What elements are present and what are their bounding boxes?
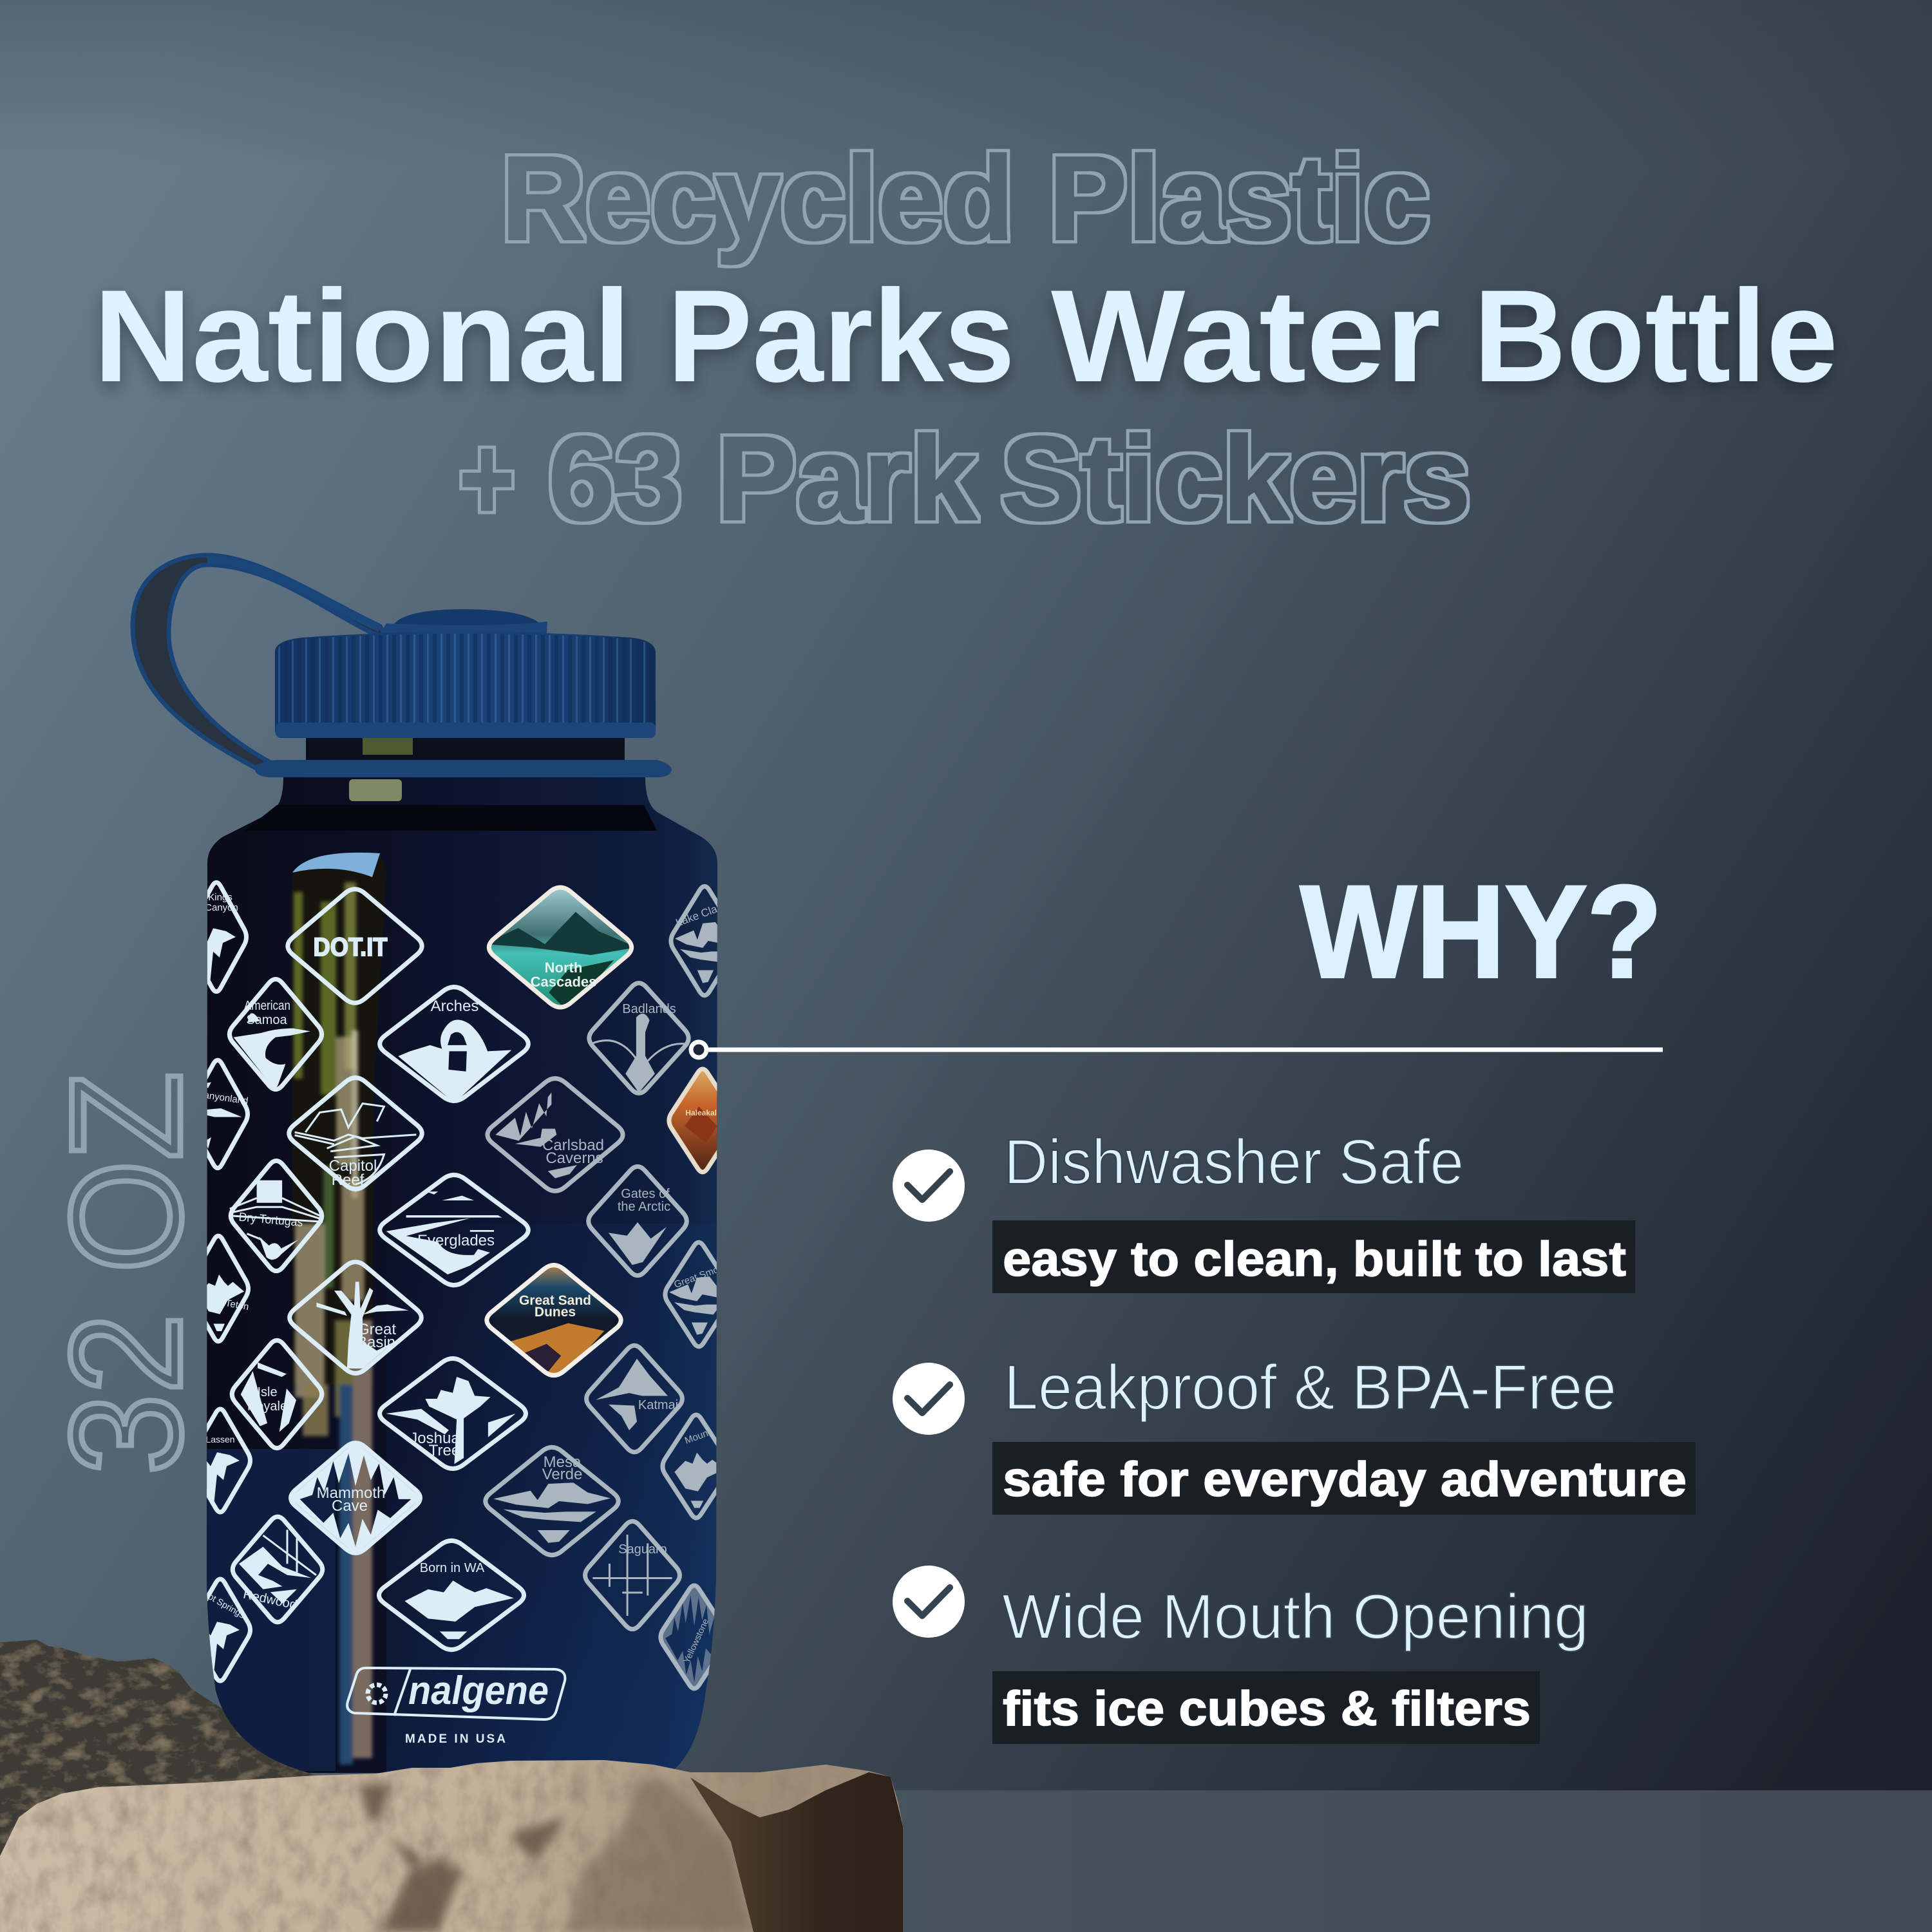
nalgene logo: nalgene [408, 1669, 549, 1713]
sticker: Carlsbad Caverns: Caverns [545, 1150, 603, 1167]
sticker: Hot Springs: Hot Springs [201, 1587, 247, 1620]
sticker: Great Sand Dunes: Great Sand [519, 1293, 591, 1308]
size label: 32 OZ: 32 OZ [37, 1072, 214, 1475]
sticker: Great Smoky Mountains [665, 1242, 732, 1347]
bottle reflections [207, 853, 717, 1777]
reflection base [292, 853, 386, 1385]
sticker: Lake Clark: Lake Clark [674, 900, 728, 929]
bottle neck [306, 734, 625, 763]
sticker: Hawaii Volcanoes: Haleakala [685, 1108, 721, 1117]
bottle strap loop [133, 555, 386, 768]
title: 63 Park Stickers outline: + [459, 412, 515, 545]
sticker: Dry Tortugas [230, 1160, 323, 1271]
neck reflection upper [363, 735, 413, 755]
sticker: North Cascades: Cascades [531, 974, 596, 990]
sticker: Gates of the Arctic: Gates of [621, 1187, 670, 1201]
sticker: American Samoa [229, 979, 322, 1090]
rock dark right face [690, 1772, 903, 1932]
feature: wide mouth: Wide Mouth Opening [1002, 1581, 1589, 1652]
sticker: Born in WA [379, 1540, 524, 1650]
reflection streaks [294, 882, 372, 1765]
title: 63 Park Stickers outline: 63 [548, 412, 682, 545]
sticker: Capitol Reef: Reef [332, 1171, 365, 1189]
rock mid-shade face [567, 1777, 753, 1932]
sticker: Great Smoky Mountains: Great Smoky [672, 1261, 730, 1291]
sticker: Arches [380, 987, 528, 1101]
sticker: Redwood: Redwood [242, 1587, 298, 1613]
sticker: American Samoa: Samoa [246, 1013, 288, 1027]
sticker: Great Sand Dunes [482, 1261, 626, 1379]
bottle [133, 555, 717, 1777]
title: National Parks Water Bottle: Parks [667, 263, 1015, 410]
title: National Parks Water Bottle: Bottle [1473, 263, 1838, 410]
sticker: Hawaii Volcanoes [667, 1065, 739, 1176]
sticker: Kings Canyon [187, 882, 246, 992]
callout line [691, 1042, 1663, 1057]
sticker: Katmai [587, 1345, 682, 1452]
sticker: DOT.IT [288, 889, 422, 1003]
title: 63 Park Stickers outline: Stickers [1001, 412, 1471, 545]
sticker: Lassen Volcanic: Lassen [205, 1434, 235, 1444]
sticker: Great Basin [290, 1262, 421, 1373]
sticker: Carlsbad Caverns [488, 1079, 623, 1191]
logo pinwheel icon [368, 1685, 386, 1703]
sticker: Katmai: Katmai [638, 1398, 678, 1412]
sticker: Gates of the Arctic: the Arctic [618, 1200, 670, 1214]
sticker: North Cascades [484, 883, 637, 1012]
sticker: Mount Rainier [663, 1415, 730, 1518]
icon: check [893, 1566, 965, 1638]
sticker: Grand Teton [188, 1236, 250, 1341]
sticker: Mesa Verde: Verde [542, 1466, 582, 1483]
sticker: Isle Royale: Isle [257, 1385, 278, 1399]
sticker: Canyonlands: Canyonland [196, 1089, 249, 1107]
nalgene logo [347, 1668, 565, 1746]
feature: leakproof [893, 1352, 1696, 1515]
sticker: Gates of the Arctic [589, 1166, 687, 1276]
sticker: Mammoth Cave: Cave [332, 1497, 368, 1515]
title: National Parks Water Bottle: National [93, 263, 631, 410]
sticker: DOT.IT: DOT.IT [313, 933, 388, 961]
feature: dishwasher safe [893, 1126, 1635, 1293]
feature: leakproof: safe for everyday adventure [1003, 1452, 1687, 1507]
sticker: Great Sand Dunes: Dunes [535, 1305, 576, 1320]
sticker: Carlsbad Caverns: Carlsbad [542, 1137, 604, 1154]
sticker: Mammoth Cave: Mammoth [317, 1484, 385, 1502]
sticker: Yellowstone [660, 1584, 728, 1690]
bottle body [207, 777, 717, 1773]
sticker: Joshua Tree: Tree [429, 1442, 460, 1459]
sticker: Isle Royale: Royale [247, 1399, 287, 1414]
feature: leakproof: Leakproof & BPA-Free [1004, 1352, 1616, 1423]
title: Recycled Plastic outline: Recycled [501, 132, 1014, 265]
sticker: Badlands: Badlands [622, 1002, 676, 1016]
feature: wide mouth: fits ice cubes & filters [1003, 1681, 1531, 1736]
feature: dishwasher safe: Dishwasher Safe [1004, 1126, 1464, 1197]
title: Recycled Plastic outline [501, 132, 1430, 265]
beige rock pedestal [0, 1760, 903, 1932]
feature: wide mouth [893, 1566, 1589, 1744]
sticker: Mount Rainier: Mount [683, 1426, 713, 1446]
icon: check [893, 1150, 965, 1222]
bottle shoulder shadow [245, 805, 657, 831]
title: Recycled Plastic outline: Plastic [1048, 132, 1430, 265]
bottle cap [275, 609, 656, 738]
sticker: Hot Springs [191, 1579, 250, 1681]
sticker: Dry Tortugas: Dry Tortugas [238, 1211, 303, 1229]
sticker: Yellowstone: Yellowstone [681, 1617, 710, 1665]
sticker: Lassen Volcanic [191, 1409, 250, 1512]
sticker: Canyonlands [188, 1060, 249, 1168]
sticker: Joshua Tree: Joshua [410, 1430, 460, 1447]
sticker: Mesa Verde: Mesa [544, 1454, 582, 1471]
sticker: Saguaro: Saguaro [618, 1542, 667, 1557]
feature: dishwasher safe: easy to clean, built to last [1003, 1232, 1626, 1287]
sticker: Lake Clark [671, 886, 738, 996]
bottle flange [255, 760, 672, 777]
why heading: WHY? [1300, 858, 1662, 1005]
icon: check [893, 1363, 965, 1435]
sticker: Mesa Verde [486, 1447, 618, 1555]
sticker: Redwood [232, 1517, 323, 1622]
rock shadow patches [358, 1784, 567, 1932]
title: 63 Park Stickers outline: Park [716, 412, 978, 545]
sticker: Great Basin: Great [357, 1321, 396, 1338]
floor [837, 1790, 1932, 1932]
title: National Parks Water Bottle [93, 263, 1838, 410]
sticker: Kings Canyon: Canyon [205, 902, 238, 913]
sticker: Joshua Tree [380, 1358, 526, 1469]
neck reflection lower [349, 779, 402, 801]
sticker: Born in WA: Born in WA [420, 1561, 485, 1575]
sticker: Badlands [589, 983, 688, 1094]
sticker: Capitol Reef: Capitol [329, 1157, 377, 1175]
sticker: Grand Teton: Grand Teton [196, 1293, 250, 1312]
nalgene logo: MADE IN USA [405, 1732, 506, 1746]
sticker: Everglades: Everglades [417, 1232, 495, 1249]
sticker: Capitol Reef [289, 1078, 422, 1189]
sticker: Isle Royale [232, 1340, 322, 1448]
sticker: North Cascades: North [545, 960, 582, 976]
sticker: Kings Canyon: Kings [208, 892, 232, 903]
stickers on bottle [187, 882, 739, 1690]
reflection sky [292, 853, 380, 877]
sticker: Arches: Arches [431, 998, 478, 1015]
sticker: Everglades [380, 1175, 528, 1285]
sticker: Mammoth Cave [289, 1442, 422, 1554]
sticker: American Samoa: American [244, 999, 290, 1013]
title: 63 Park Stickers outline [459, 412, 1471, 545]
dark rock behind bottle [0, 1640, 314, 1855]
sticker: Saguaro [585, 1521, 679, 1629]
title: National Parks Water Bottle: Water [1051, 263, 1441, 410]
sticker: Great Basin: Basin [357, 1334, 395, 1351]
